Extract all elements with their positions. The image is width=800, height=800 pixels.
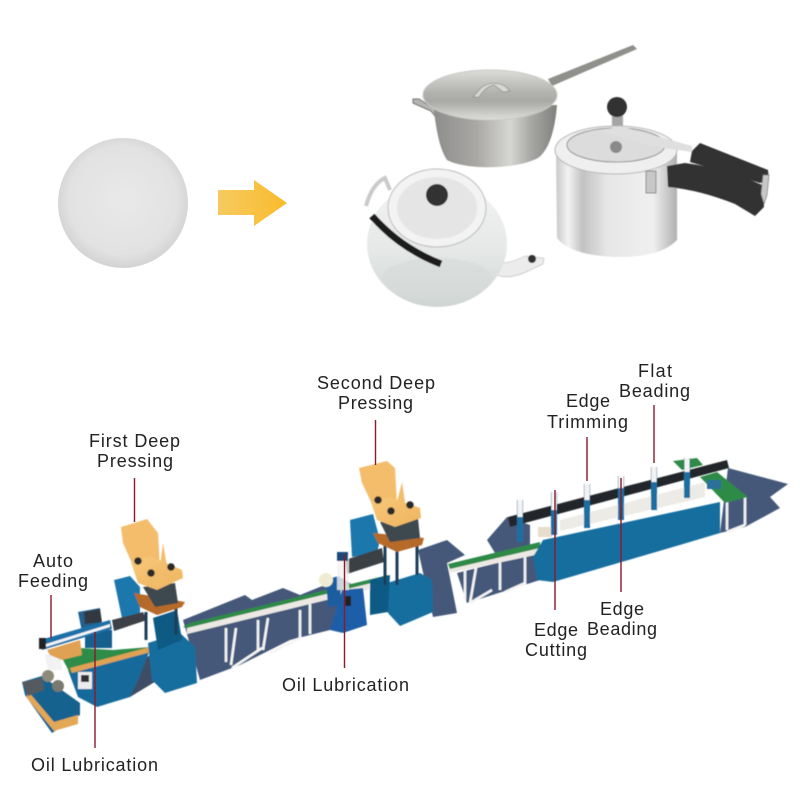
arrow: disc becomes cookware	[218, 180, 287, 226]
second press back column	[350, 514, 380, 557]
second lubrication cabinet	[330, 588, 367, 633]
first press grate	[134, 593, 185, 615]
blue box behind feed rail	[78, 608, 103, 637]
label: Edge Cutting: Cutting	[525, 640, 587, 660]
label: Flat Beading: Flat	[638, 361, 672, 381]
shadows under conveyors	[183, 468, 788, 680]
label: Edge Trimming: Edge	[566, 391, 610, 411]
label: Oil Lubrication, first: Oil Lubrication	[31, 755, 158, 775]
label: Auto Feeding: Auto	[33, 551, 73, 571]
second press yellow head	[359, 461, 421, 527]
aluminium disc	[58, 138, 188, 268]
label: Oil Lubrication, second: Oil Lubrication	[282, 675, 409, 695]
first press yellow head	[121, 519, 183, 590]
white conveyor legs	[226, 497, 745, 668]
second press pipe	[345, 548, 384, 574]
label: Edge Cutting: Edge	[534, 620, 578, 640]
tool towers	[520, 458, 687, 542]
third conveyor	[448, 547, 540, 573]
first press back column	[114, 576, 140, 623]
second press grate	[373, 533, 424, 552]
long finishing machine	[533, 502, 720, 582]
production line machinery	[22, 458, 788, 733]
icon: kettle	[366, 169, 544, 307]
label: Edge Beading: Edge	[600, 599, 644, 619]
first left machine body	[128, 655, 158, 697]
callout lines	[51, 405, 654, 748]
label: First Deep Pressing: Pressing	[97, 451, 173, 471]
first conveyor	[187, 578, 388, 634]
first press base	[148, 633, 197, 693]
auto feeding base unit	[22, 650, 80, 733]
label: Second Deep Pressing: Pressing	[338, 393, 413, 413]
label: Auto Feeding: Feeding	[18, 571, 88, 591]
label: First Deep Pressing: First Deep	[89, 431, 180, 451]
label: Edge Beading: Beading	[587, 619, 657, 639]
second press base	[387, 573, 433, 626]
icon: saucepan with lid	[413, 45, 637, 167]
label: Second Deep Pressing: Second Deep	[317, 373, 435, 393]
control panel	[78, 672, 92, 689]
feed rail	[40, 620, 112, 650]
feeding table	[62, 647, 151, 673]
label: Flat Beading: Beading	[619, 381, 690, 401]
icon: pressure cooker	[555, 97, 769, 257]
label: Edge Trimming: Trimming	[547, 412, 628, 432]
